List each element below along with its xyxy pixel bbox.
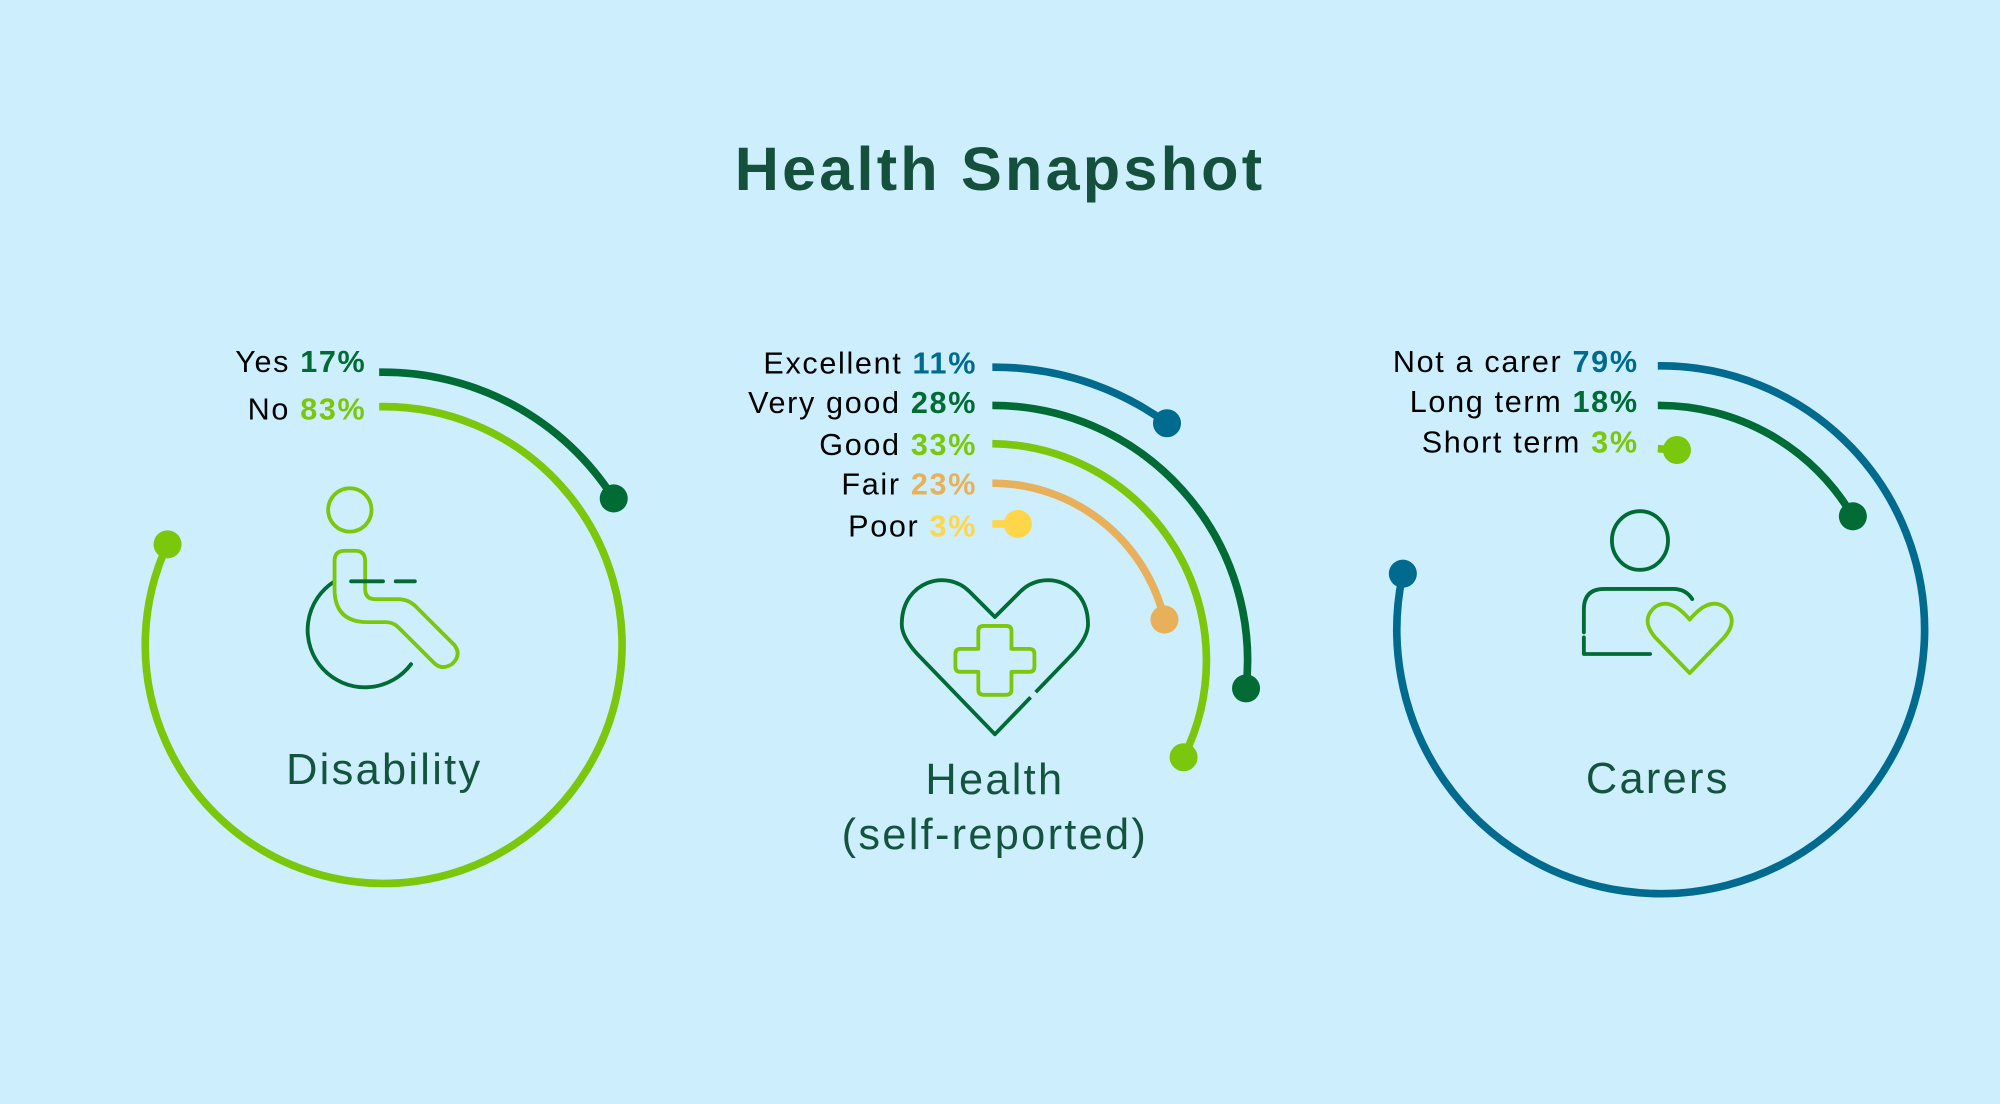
icon: wheelchair — [308, 488, 458, 687]
panel: disability — [145, 345, 628, 883]
arc: yes 17% — [379, 372, 628, 512]
legend: carers: Not a carer 79% — [1393, 345, 1639, 379]
label: health: Health — [925, 756, 1064, 804]
arc: very good — [992, 405, 1260, 702]
panel: carers — [1389, 345, 1925, 894]
legend: health: Fair 23% — [841, 468, 977, 502]
title: Health Snapshot — [735, 135, 1265, 203]
legend: disability — [235, 345, 366, 426]
arc: no 83% — [145, 407, 622, 883]
legend: carers: Long term 18% — [1410, 385, 1639, 419]
arc: long term — [1658, 405, 1867, 530]
arc: excellent — [992, 367, 1181, 437]
legend: disability: Yes 17% — [235, 345, 366, 379]
legend: health — [748, 347, 977, 544]
legend: carers: Short term 3% — [1422, 426, 1639, 460]
arc: fair — [992, 483, 1178, 634]
label: carers: Carers — [1586, 755, 1730, 803]
legend: health: Excellent 11% — [763, 347, 977, 381]
arc: short term — [1658, 436, 1691, 464]
panel: health — [748, 347, 1260, 859]
icon: carer with heart — [1584, 511, 1732, 673]
label: health: (self-reported) — [842, 811, 1148, 859]
label: disability: Disability — [286, 746, 482, 794]
arc: good — [992, 444, 1206, 771]
legend: carers — [1393, 345, 1639, 460]
legend: disability: No 83% — [248, 392, 366, 426]
icon: heart with cross — [902, 580, 1088, 734]
arc: not a carer — [1389, 366, 1925, 894]
arc: poor — [992, 510, 1032, 538]
legend: health: Good 33% — [819, 428, 977, 462]
legend: health: Poor 3% — [848, 510, 977, 544]
legend: health: Very good 28% — [748, 386, 977, 420]
label: health — [842, 756, 1148, 859]
